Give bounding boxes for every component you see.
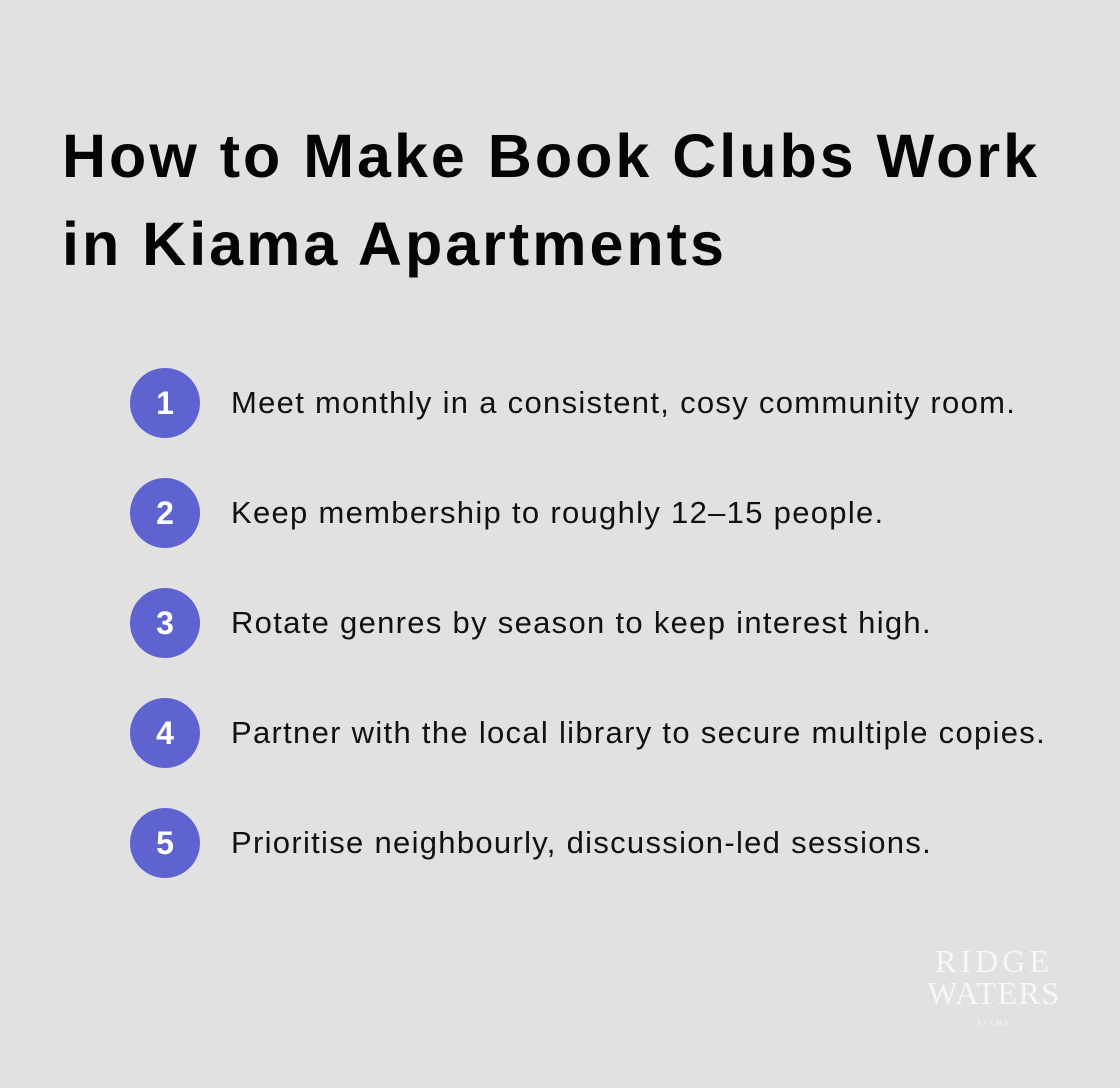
item 5: Prioritise neighbourly, discussion-led sessions.	[231, 825, 932, 860]
item 1: Meet monthly in a consistent, cosy community room.	[231, 385, 1016, 420]
item 2	[130, 478, 884, 548]
logo	[927, 943, 1061, 1027]
item 2: Keep membership to roughly 12–15 people.	[231, 495, 884, 530]
item 1	[130, 368, 1016, 438]
title: How to Make Book Clubs Work	[62, 122, 1040, 190]
item 4: Partner with the local library to secure multiple copies.	[231, 715, 1046, 750]
item 3: 3	[156, 605, 174, 641]
item 4	[130, 698, 1046, 768]
item 2: 2	[156, 495, 174, 531]
title: in Kiama Apartments	[62, 210, 727, 278]
item 5	[130, 808, 932, 878]
logo: WATERS	[927, 975, 1061, 1011]
item 1: 1	[156, 385, 174, 421]
title	[62, 122, 1040, 278]
logo: RIDGE	[935, 943, 1053, 979]
item 4: 4	[156, 715, 174, 751]
item 3	[130, 588, 932, 658]
item 5: 5	[156, 825, 174, 861]
item 3: Rotate genres by season to keep interest high.	[231, 605, 932, 640]
logo: KIAMA	[977, 1019, 1011, 1027]
